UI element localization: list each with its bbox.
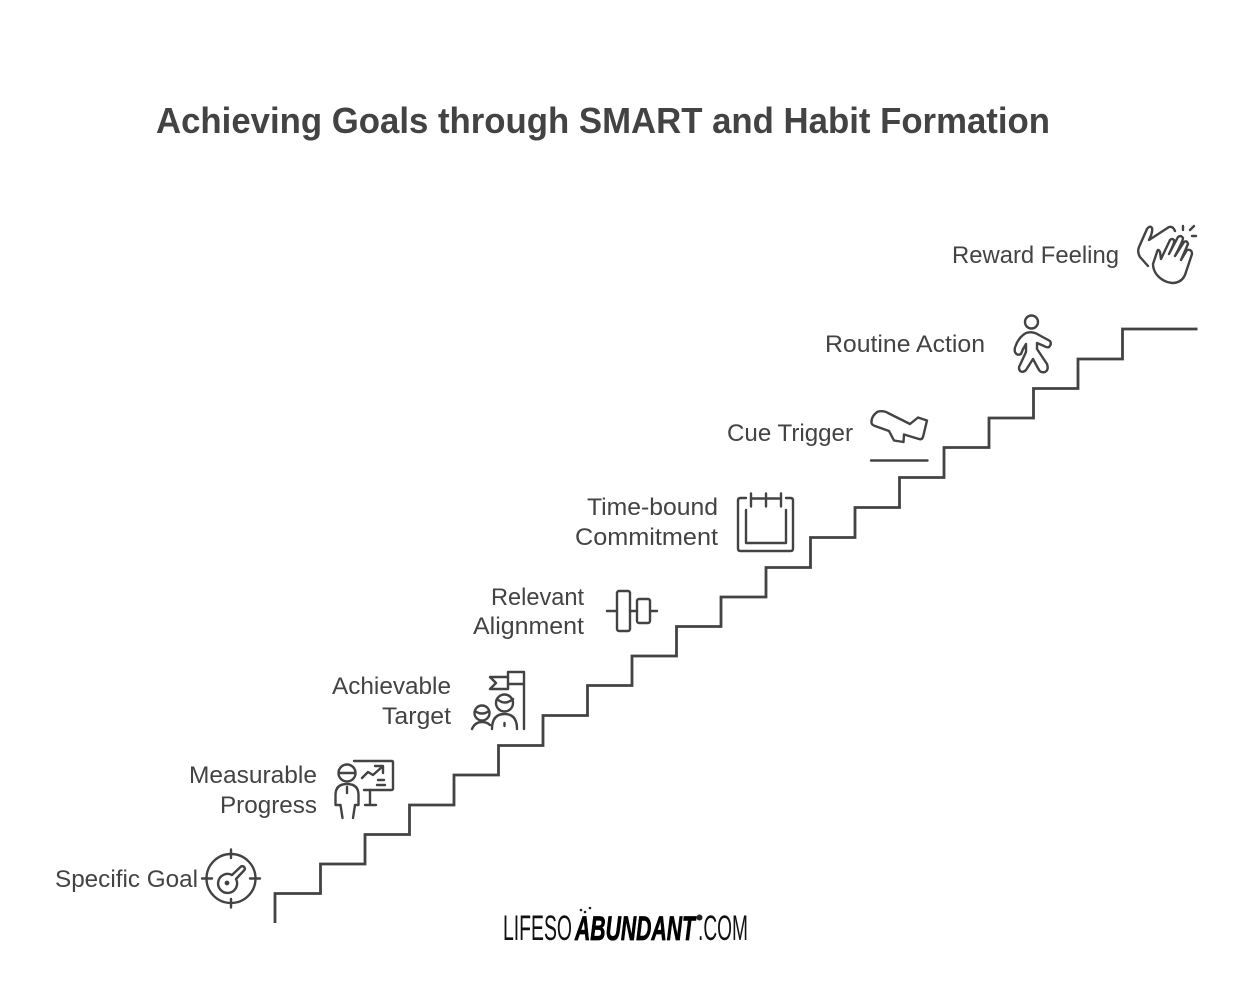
logo: lifesoabundant.com: LIFESO	[503, 909, 572, 948]
step 1: specific goal	[55, 850, 260, 908]
step 8: reward feeling	[952, 226, 1196, 283]
label: routine action: Routine Action	[825, 331, 985, 358]
label: measurable progress: Measurable	[189, 762, 317, 789]
icon: presenter with chart board	[336, 761, 393, 818]
step 2: measurable progress	[189, 761, 393, 819]
title: Achieving Goals through SMART and Habit Formation	[156, 100, 1050, 141]
step 7: routine action	[825, 316, 1051, 372]
staircase	[275, 329, 1198, 923]
label: cue trigger: Cue Trigger	[727, 420, 853, 447]
step 3: achievable target	[332, 672, 524, 730]
label: time-bound commitment: Time-bound	[587, 494, 718, 521]
step 2: measurable progress: Progress	[220, 792, 317, 819]
label: relevant alignment: Relevant	[491, 584, 584, 611]
icon: airplane take-off	[871, 411, 928, 460]
icon: walking person	[1015, 316, 1051, 372]
label: achievable target: Achievable	[332, 673, 451, 700]
logo: lifesoabundant.com	[503, 907, 748, 948]
step 5: time-bound commitment	[575, 494, 793, 551]
label: reward feeling: Reward Feeling	[952, 242, 1119, 269]
icon: team with flag	[472, 672, 524, 729]
icon: target with key	[202, 850, 260, 908]
label: specific goal: Specific Goal	[55, 866, 198, 893]
icon: calendar	[738, 494, 793, 551]
icon: clapping hands	[1138, 226, 1196, 283]
icon: align shapes	[607, 591, 657, 631]
step 4: relevant alignment	[473, 584, 657, 640]
step 3: achievable target: Target	[382, 703, 451, 730]
step 4: relevant alignment: Alignment	[473, 613, 584, 640]
step 5: time-bound commitment: Commitment	[575, 524, 718, 551]
logo: lifesoabundant.com: ABUNDANT	[574, 910, 697, 948]
logo: lifesoabundant.com: .COM	[698, 909, 748, 948]
step 6: cue trigger	[727, 411, 928, 460]
